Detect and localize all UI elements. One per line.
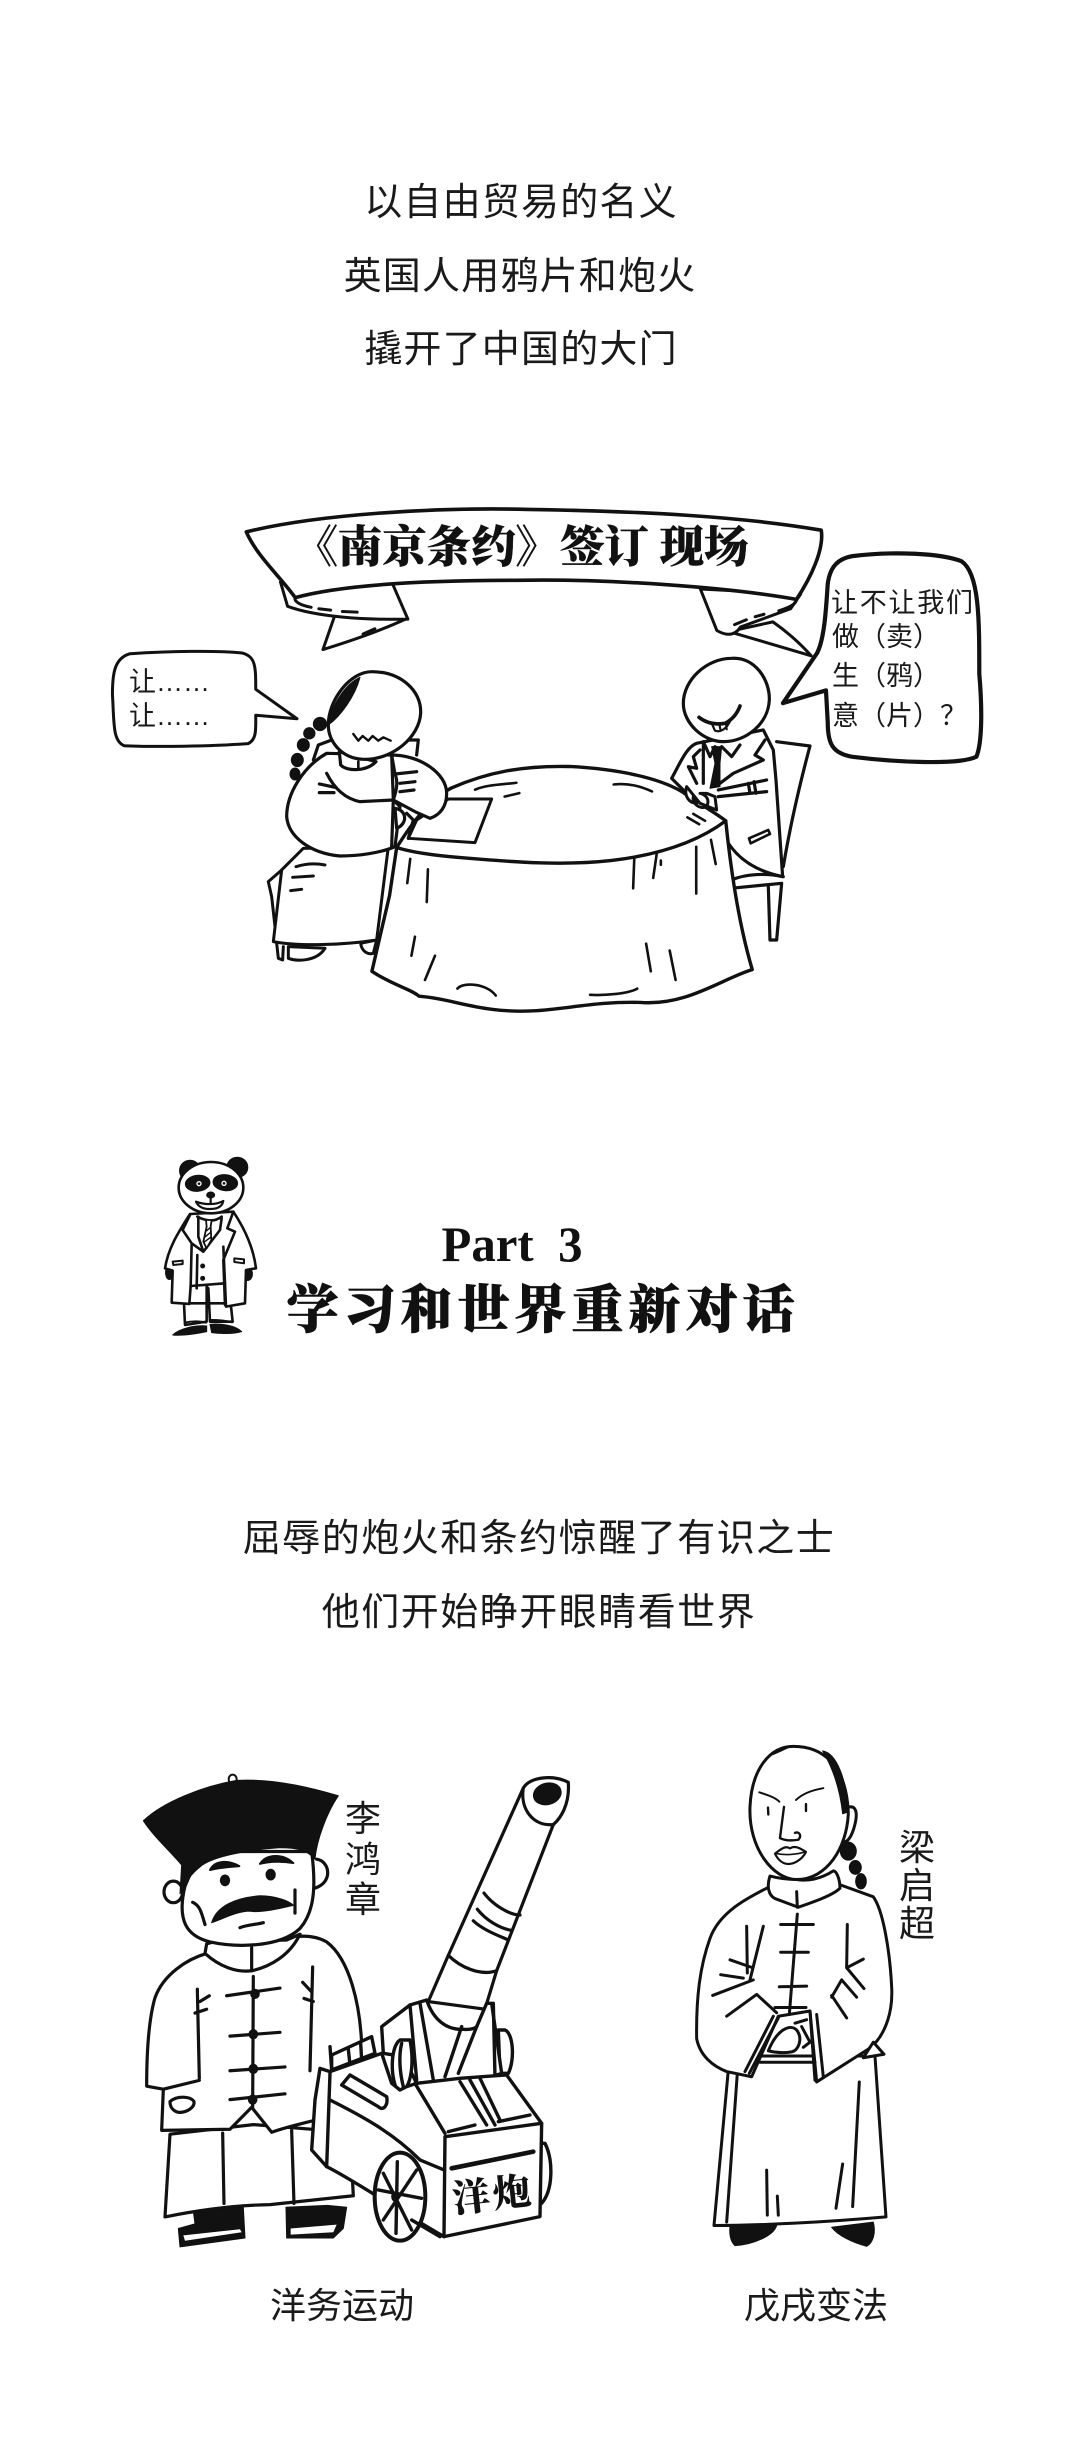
figure: Qing official upper body with treaty paper xyxy=(287,672,492,856)
name label: Li Hongzhang xyxy=(345,1798,381,1920)
section title: 学习和世界重新对话 xyxy=(286,1282,800,1340)
robe xyxy=(147,1934,362,2247)
figure: British envoy hands on table xyxy=(686,787,717,810)
icon: panda doctor mascot xyxy=(165,1158,256,1335)
left speech bubble xyxy=(112,651,297,746)
right speech bubble text: 意（片）？ xyxy=(832,701,967,731)
part number: Part 3 xyxy=(442,1216,582,1272)
right speech bubble text: 生（鸦） xyxy=(832,661,940,691)
section heading xyxy=(286,1216,800,1340)
caption: Hundred Days Reform: 戊戌变法 xyxy=(744,2285,888,2326)
banner ribbon xyxy=(246,509,822,656)
name label: Liang Qichao: 超 xyxy=(899,1903,935,1944)
head with hat xyxy=(143,1775,338,1945)
name label: Liang Qichao: 梁 xyxy=(899,1827,935,1868)
left speech bubble text: 让…… xyxy=(129,667,210,697)
right speech bubble text: 让不让我们 xyxy=(831,588,973,618)
left speech bubble text: 让…… xyxy=(129,701,210,731)
intro text block: 以自由贸易的名义 xyxy=(364,182,678,224)
name label: Li Hongzhang: 鸿 xyxy=(345,1839,381,1880)
figure: Qing official robe and chair xyxy=(268,847,388,960)
caption: Self-Strengthening Movement: 洋务运动 xyxy=(270,2285,414,2326)
shoes and gown xyxy=(714,2056,886,2246)
section intro text xyxy=(243,1518,835,1634)
jacket xyxy=(697,1871,892,2082)
intro text block: 撬开了中国的大门 xyxy=(364,329,678,371)
figure: British envoy body and chair xyxy=(672,658,810,940)
name label: Li Hongzhang: 章 xyxy=(345,1879,381,1920)
figure: Liang Qichao xyxy=(697,1746,892,2246)
figure: Li Hongzhang xyxy=(143,1775,362,2247)
cannon carriage with wheels xyxy=(312,2000,551,2241)
intro text block xyxy=(344,182,696,371)
name label: Liang Qichao: 启 xyxy=(899,1865,935,1906)
cannon label: 洋炮 xyxy=(450,2171,536,2221)
illustration: Treaty of Nanking signing scene xyxy=(112,509,981,1011)
intro text block: 英国人用鸦片和炮火 xyxy=(344,256,696,298)
right speech bubble text: 做（卖） xyxy=(832,622,940,652)
left speech bubble text xyxy=(129,667,210,731)
cannon barrel xyxy=(428,1778,568,2009)
right speech bubble text xyxy=(831,588,973,731)
name label: Li Hongzhang: 李 xyxy=(345,1798,381,1839)
round table with tablecloth xyxy=(372,766,752,1011)
head with queue xyxy=(750,1746,866,1889)
right speech bubble xyxy=(783,553,981,762)
name label: Liang Qichao xyxy=(899,1827,935,1944)
section intro text: 他们开始睁开眼睛看世界 xyxy=(322,1592,756,1634)
treaty paper xyxy=(408,799,492,843)
banner title: 《南京条约》签订 现场 xyxy=(294,522,748,572)
section intro text: 屈辱的炮火和条约惊醒了有识之士 xyxy=(243,1518,835,1560)
